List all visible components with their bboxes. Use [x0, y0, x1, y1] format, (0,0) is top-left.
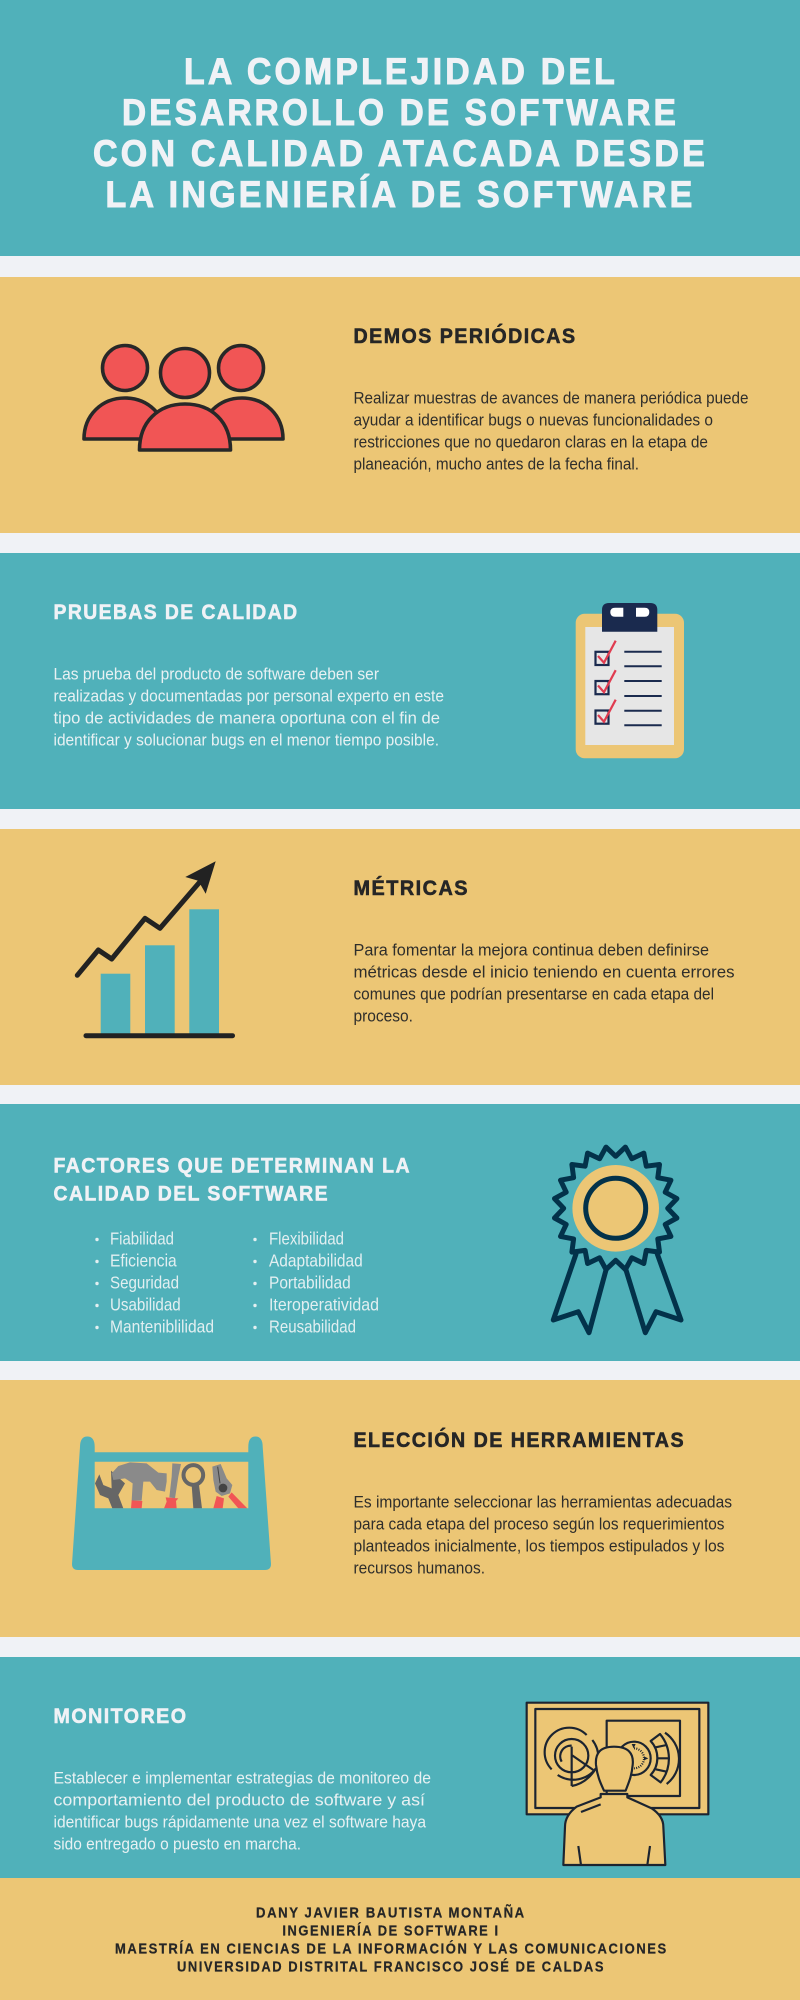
text: demos periódicas: ayudar a identificar bugs o nuevas funcionalidades o: [354, 412, 713, 430]
text: pruebas de calidad: realizadas y documentadas por personal experto en este: [54, 688, 444, 706]
title: LA INGENIERÍA DE SOFTWARE: [106, 174, 696, 215]
footer panel: [0, 1878, 800, 2000]
text: métricas: comunes que podrían presentarse en cada etapa del: [354, 986, 714, 1004]
header panel: [0, 0, 800, 256]
heading: pruebas de calidad: PRUEBAS DE CALIDAD: [54, 600, 298, 624]
panel: métricas: [0, 829, 800, 1085]
list: column one: Eficiencia: [110, 1250, 177, 1270]
text: elección de herramientas: recursos humanos.: [354, 1560, 485, 1578]
text: monitoreo: [54, 1770, 431, 1854]
heading: factores: [54, 1154, 411, 1206]
footer credits: MAESTRÍA EN CIENCIAS DE LA INFORMACIÓN Y LAS COMUNICACIONES: [115, 1939, 668, 1957]
text: demos periódicas: [354, 390, 748, 474]
title: CON CALIDAD ATACADA DESDE: [93, 133, 708, 174]
list: column two: Flexibilidad: [269, 1228, 344, 1248]
list: column one: Seguridad: [110, 1272, 179, 1292]
list: column two: Adaptabilidad: [269, 1250, 363, 1270]
text: pruebas de calidad: identificar y solucionar bugs en el menor tiempo posible.: [54, 732, 439, 750]
icon: people: [84, 346, 283, 450]
text: demos periódicas: Realizar muestras de avances de manera periódica puede: [354, 390, 748, 408]
footer credits: [115, 1903, 668, 1975]
text: elección de herramientas: planteados inicialmente, los tiempos estipulados y los: [354, 1538, 724, 1556]
text: demos periódicas: planeación, mucho antes de la fecha final.: [354, 456, 639, 474]
panel: elección de herramientas: [0, 1380, 800, 1637]
box: [72, 1436, 271, 1570]
title: LA COMPLEJIDAD DEL: [184, 51, 618, 92]
list: column two: [253, 1228, 379, 1336]
heading: factores: CALIDAD DEL SOFTWARE: [54, 1182, 329, 1206]
list: column one: [95, 1228, 214, 1336]
list: column two: Portabilidad: [269, 1272, 351, 1292]
text: métricas: Para fomentar la mejora continua deben definirse: [354, 942, 709, 960]
footer credits: DANY JAVIER BAUTISTA MONTAÑA: [256, 1903, 526, 1921]
title: DESARROLLO DE SOFTWARE: [122, 92, 679, 133]
icon: toolbox: [72, 1436, 271, 1570]
text: elección de herramientas: para cada etapa del proceso según los requerimientos: [354, 1516, 724, 1534]
panel: demos periódicas: [0, 277, 800, 533]
list: column two: Iteroperatividad: [269, 1294, 379, 1314]
heading: factores: FACTORES QUE DETERMINAN LA: [54, 1154, 411, 1178]
text: demos periódicas: restricciones que no quedaron claras en la etapa de: [354, 434, 708, 452]
text: pruebas de calidad: [54, 666, 444, 750]
panel: monitoreo: [0, 1657, 800, 1878]
text: métricas: [354, 942, 734, 1026]
footer credits: INGENIERÍA DE SOFTWARE I: [282, 1922, 500, 1939]
icon: award rosette: [553, 1147, 681, 1333]
text: monitoreo: sido entregado o puesto en marcha.: [54, 1836, 301, 1854]
text: monitoreo: Establecer e implementar estrategias de monitoreo de: [54, 1770, 431, 1788]
list: column one: Usabilidad: [110, 1294, 181, 1314]
heading: monitoreo: MONITOREO: [54, 1704, 188, 1728]
text: monitoreo: identificar bugs rápidamente una vez el software haya: [54, 1814, 427, 1832]
icon: clipboard: [576, 603, 684, 758]
heading: elección de herramientas: ELECCIÓN DE HERRAMIENTAS: [354, 1427, 685, 1452]
text: métricas: métricas desde el inicio teniendo en cuenta errores: [354, 964, 734, 982]
footer credits: UNIVERSIDAD DISTRITAL FRANCISCO JOSÉ DE CALDAS: [177, 1958, 605, 1975]
title: [93, 51, 708, 215]
heading: demos periódicas: DEMOS PERIÓDICAS: [354, 323, 576, 348]
text: pruebas de calidad: tipo de actividades de manera oportuna con el fin de: [54, 710, 440, 728]
text: elección de herramientas: [354, 1494, 732, 1578]
icon: person at monitor: [527, 1703, 708, 1865]
text: métricas: proceso.: [354, 1008, 413, 1026]
list: column one: Fiabilidad: [110, 1228, 174, 1248]
panel: factores: [0, 1104, 800, 1361]
list: column two: Reusabilidad: [269, 1316, 356, 1336]
text: pruebas de calidad: Las prueba del producto de software deben ser: [54, 666, 379, 684]
icon: growth bar chart: [77, 861, 232, 1036]
list: column one: Manteniblilidad: [110, 1316, 214, 1336]
panel: pruebas de calidad: [0, 553, 800, 809]
text: elección de herramientas: Es importante seleccionar las herramientas adecuadas: [354, 1494, 732, 1512]
text: monitoreo: comportamiento del producto de software y así: [54, 1792, 425, 1810]
heading: métricas: MÉTRICAS: [354, 875, 469, 900]
tools: [95, 1462, 247, 1508]
